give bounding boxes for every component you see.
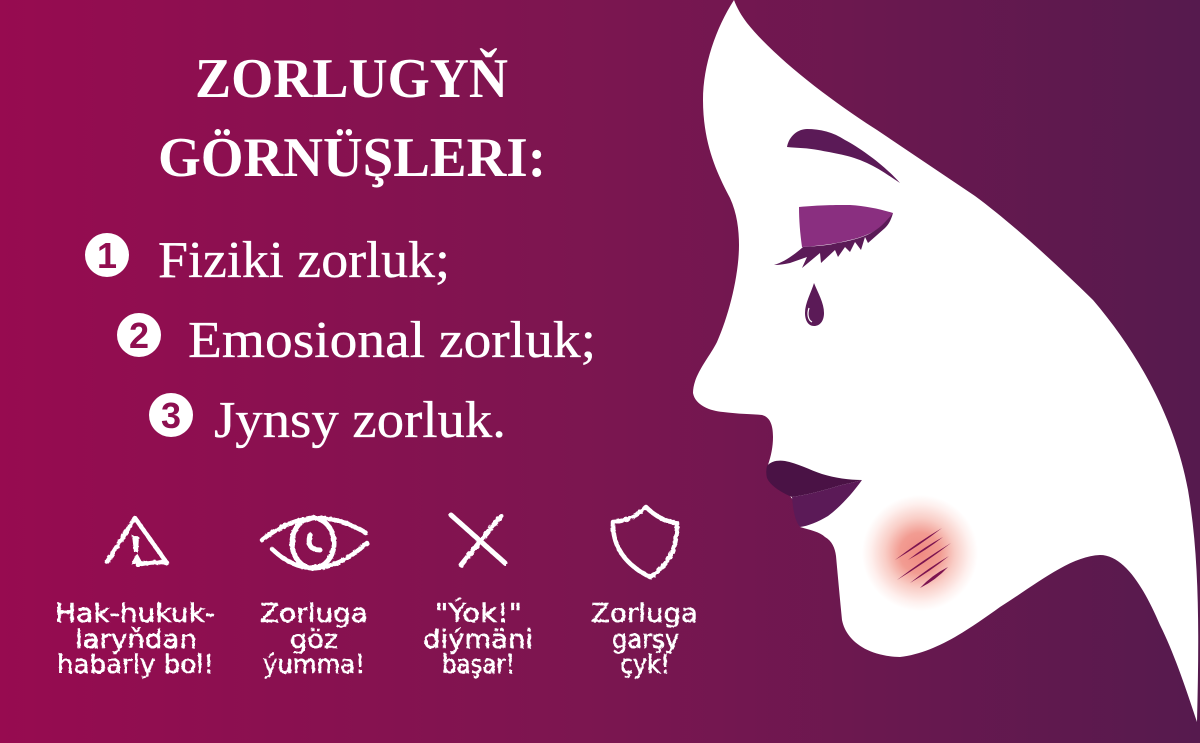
label [591, 599, 698, 680]
advice 4: stand against violence [591, 507, 698, 680]
label: çyk! [620, 650, 670, 680]
label: ýumma! [263, 650, 365, 680]
title: GÖRNÜŞLERI: [158, 127, 546, 189]
list of violence types [85, 232, 596, 449]
item 3: sexual violence: Jynsy zorluk. [214, 392, 506, 449]
title: ZORLUGYŇ [195, 47, 508, 110]
face silhouette [693, 0, 1198, 722]
scratch marks [895, 528, 951, 588]
label: laryňdan [75, 625, 197, 655]
label: habarly bol! [57, 650, 214, 680]
advice 3: learn to say no [423, 515, 533, 680]
label: göz [290, 625, 338, 655]
label: Zorluga [260, 599, 368, 629]
label [55, 599, 215, 680]
teardrop [805, 283, 824, 326]
icon: eye [262, 518, 367, 568]
eyelashes [774, 213, 893, 268]
item 2: emotional violence: Emosional zorluk; [188, 312, 596, 369]
icon: shield [613, 507, 677, 577]
eyebrow [787, 129, 900, 183]
item 3: sexual violence: 3 [161, 395, 181, 436]
eyelid [799, 205, 893, 247]
icon: warning triangle [107, 518, 167, 565]
label: Hak-hukuk- [55, 599, 215, 629]
label: diýmäni [423, 625, 533, 655]
lower lip [792, 480, 862, 527]
icon: cross [451, 515, 505, 565]
advice 2: do not turn a blind eye [260, 518, 368, 680]
label: garşy [612, 625, 679, 655]
item 1: physical violence: Fiziki zorluk; [158, 232, 450, 289]
item 1: physical violence: 1 [97, 235, 117, 276]
upper lip [766, 461, 862, 497]
item 2: emotional violence: 2 [129, 315, 149, 356]
title [158, 47, 546, 189]
woman's face profile [693, 0, 1198, 722]
bruise glow [862, 495, 978, 611]
label: başar! [442, 650, 515, 680]
label: "Ýok!" [435, 597, 522, 629]
advice 1: know your rights [55, 518, 215, 680]
label [423, 597, 533, 680]
label: Zorluga [591, 599, 698, 629]
label [260, 599, 368, 680]
